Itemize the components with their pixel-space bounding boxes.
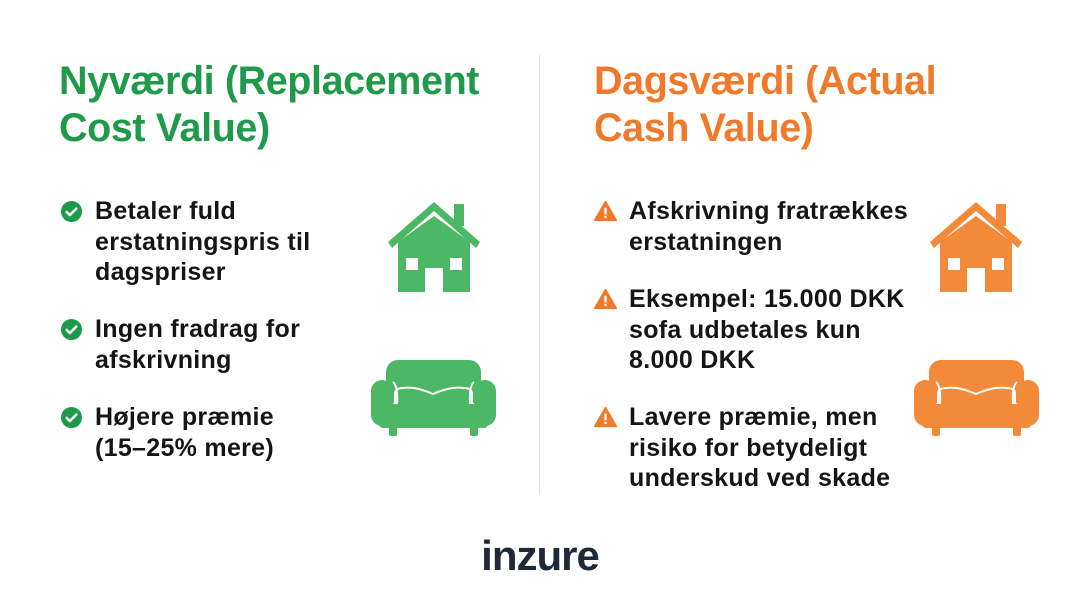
right item 2: Eksempel: 15.000 DKK <box>629 285 905 313</box>
icon: green sofa <box>371 360 496 436</box>
right item 3: underskud ved skade <box>629 464 890 492</box>
left item 1: dagspriser <box>95 258 226 286</box>
right item 1: erstatningen <box>629 228 783 256</box>
title: right: Cash Value) <box>594 106 814 150</box>
left item 3: (15–25% mere) <box>95 434 274 462</box>
title: right: Dagsværdi (Actual <box>594 59 936 103</box>
icon: orange sofa <box>914 360 1039 436</box>
right item 2: sofa udbetales kun <box>629 316 861 344</box>
logo: inzure <box>481 532 599 579</box>
left item 2: afskrivning <box>95 346 232 374</box>
left item 3: Højere præmie <box>95 403 274 431</box>
right item 2: 8.000 DKK <box>629 346 755 374</box>
icon: orange house <box>930 202 1022 292</box>
title: left: Nyværdi (Replacement <box>59 59 479 103</box>
left item 2: Ingen fradrag for <box>95 315 300 343</box>
right item 1: Afskrivning fratrækkes <box>629 197 908 225</box>
right item 3: Lavere præmie, men <box>629 403 878 431</box>
left item 1 <box>61 197 310 286</box>
right item 3 <box>594 403 890 492</box>
title: left <box>59 59 479 150</box>
right item 3: risiko for betydeligt <box>629 434 867 462</box>
left item 1: erstatningspris til <box>95 228 310 256</box>
divider <box>539 55 540 495</box>
left item 2 <box>61 315 300 374</box>
right item 1 <box>594 197 908 256</box>
left item 3 <box>61 403 274 462</box>
left item 1: Betaler fuld <box>95 197 236 225</box>
title: right <box>594 59 936 150</box>
right item 2 <box>594 285 905 374</box>
title: left: Cost Value) <box>59 106 270 150</box>
icon: green house <box>388 202 480 292</box>
